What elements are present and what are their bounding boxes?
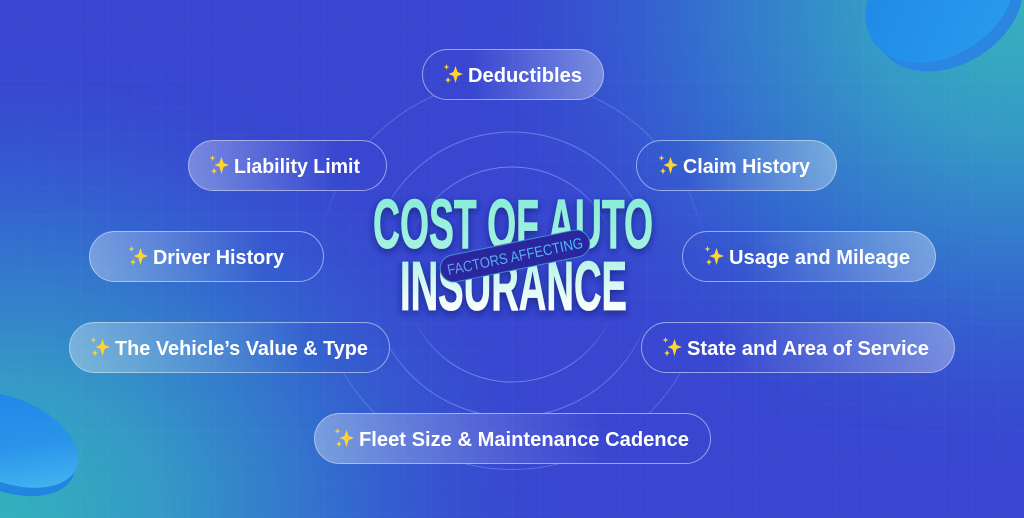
icon: sparkles (128, 246, 148, 266)
icon: sparkles (210, 155, 229, 174)
icon: sparkles (662, 337, 682, 356)
pill: State and Area of Service: State and Area of Service (687, 338, 929, 360)
tag: factors affecting: FACTORS AFFECTING (446, 235, 585, 279)
title (373, 185, 653, 325)
icon: sparkles (444, 64, 463, 84)
pill: State and Area of Service (642, 322, 954, 372)
pill: Fleet Size & Maintenance Cadence (314, 414, 710, 464)
pill: The Vehicle's Value & Type (70, 322, 390, 372)
pill: Liability Limit (188, 140, 386, 190)
pill: Usage and Mileage (682, 232, 936, 282)
decorative disk: top right (841, 0, 1024, 100)
pill: Driver History: Driver History (153, 247, 285, 269)
pill: Usage and Mileage: Usage and Mileage (729, 247, 910, 269)
title: COST OF AUTO (373, 185, 653, 263)
concentric rings (317, 80, 707, 470)
pill: Deductibles (422, 50, 604, 100)
icon: sparkles (658, 155, 678, 174)
pill: Fleet Size & Maintenance Cadence: Fleet Size & Maintenance Cadence (359, 429, 689, 451)
pill: Deductibles: Deductibles (468, 65, 582, 87)
decorative disk: bottom left (0, 373, 92, 515)
icon: sparkles (90, 337, 110, 356)
pill: Driver History (90, 232, 324, 282)
icon: sparkles (704, 246, 724, 266)
pill: Claim History: Claim History (683, 156, 811, 178)
pill: Liability Limit: Liability Limit (234, 156, 360, 178)
icon: sparkles (334, 428, 354, 448)
pill: Claim History (636, 140, 836, 190)
pill: The Vehicle's Value & Type: The Vehicle’s Value & Type (115, 338, 368, 360)
title: INSURANCE (400, 247, 627, 325)
